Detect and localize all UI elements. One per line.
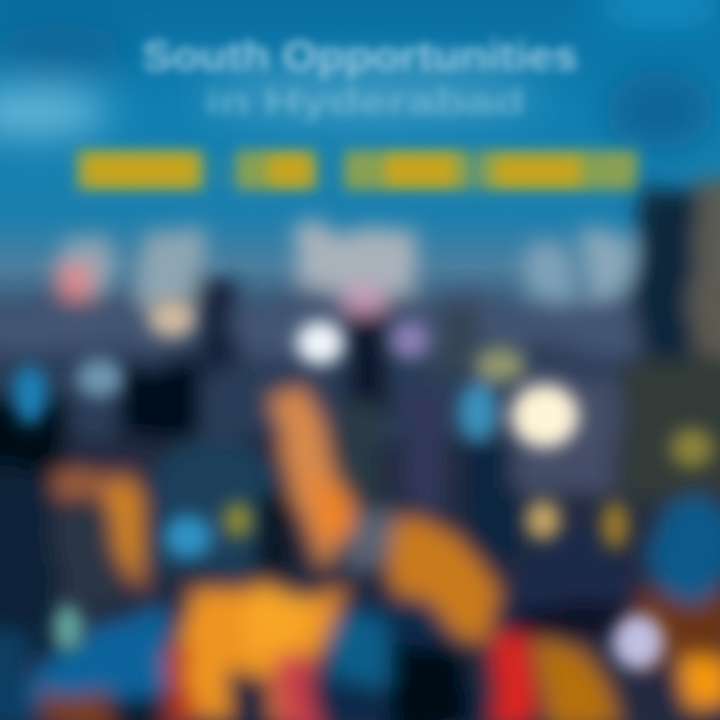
- skyline haze: [0, 300, 720, 350]
- title: [142, 32, 578, 122]
- dome bottom centre: [322, 596, 480, 720]
- window lights: [12, 298, 714, 670]
- title line two: in Hyderabad: [205, 81, 525, 122]
- orange plaza: [170, 585, 345, 720]
- headline band: olive glow behind the four words: [76, 150, 638, 190]
- dark towers: [200, 280, 238, 375]
- orange streets: [272, 395, 352, 570]
- headline text: TOP UP COMPANIES: [80, 146, 630, 193]
- clouds: [0, 0, 720, 150]
- right tower: [636, 190, 694, 360]
- pale distant towers: [62, 230, 112, 300]
- right street lights: [490, 625, 535, 720]
- block bottom left: [30, 610, 170, 705]
- title line one: South Opportunities: [142, 32, 578, 79]
- right blue block: [650, 500, 720, 600]
- city scene: [0, 185, 720, 720]
- yellow headline: [76, 146, 638, 193]
- headline highlights: [86, 156, 580, 184]
- dome right: [510, 525, 640, 620]
- dome left: [150, 442, 290, 575]
